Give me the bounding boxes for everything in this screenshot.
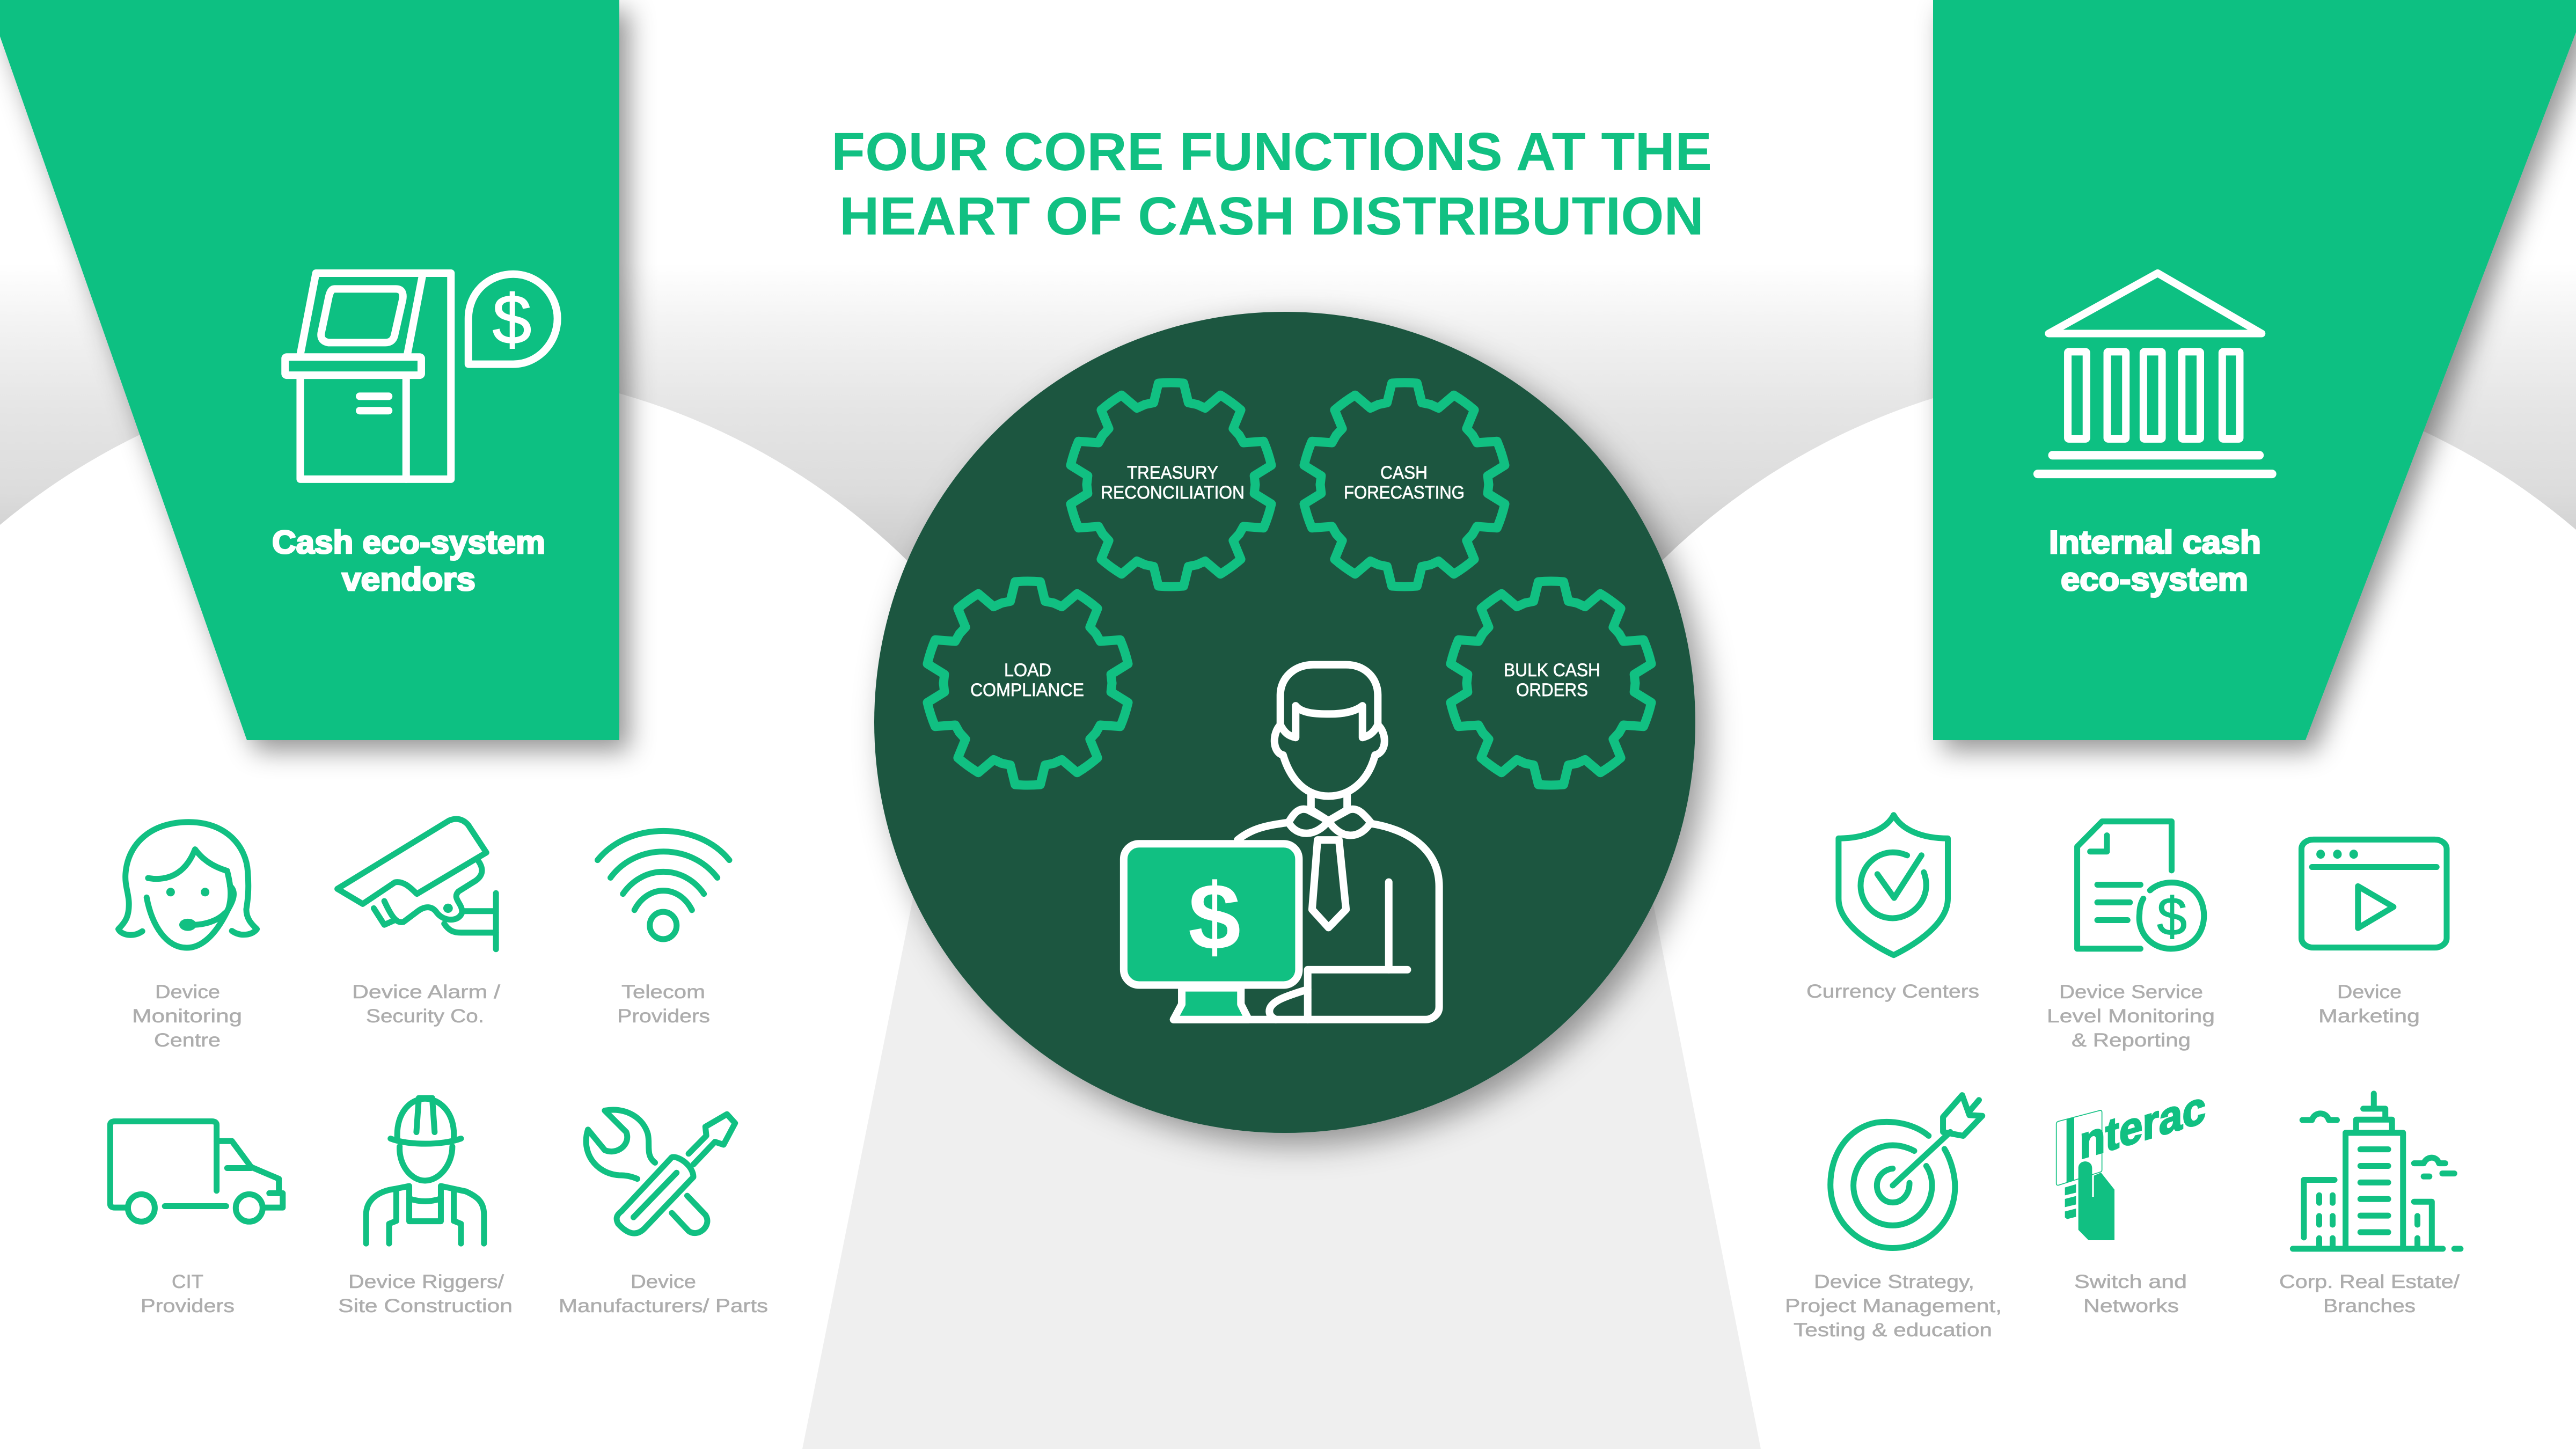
label: switch and networks: Networks: [2083, 1296, 2179, 1316]
label: device alarm: Security Co.: [366, 1006, 484, 1027]
label: device service level: Device Service: [2059, 982, 2203, 1002]
label: device riggers: Device Riggers/: [348, 1271, 504, 1292]
panel heading: [2049, 524, 2261, 597]
panel: internal cash eco-system: [1933, 0, 2576, 740]
panel heading: [272, 524, 545, 597]
label: device marketing: Device: [2337, 982, 2402, 1002]
label: cit providers: Providers: [141, 1296, 235, 1316]
gear: bulk cash orders: [1446, 581, 1656, 785]
icon: device monitoring centre: [119, 822, 257, 948]
label: device manufacturers: Manufacturers/ Parts: [559, 1296, 768, 1316]
title: HEART OF CASH DISTRIBUTION: [839, 186, 1704, 246]
label: device monitoring centre: [132, 982, 242, 1051]
left icon grid: [110, 819, 768, 1316]
label: currency centers: Currency Centers: [1806, 981, 1979, 1002]
gear: bulk cash orders: ORDERS: [1516, 680, 1588, 700]
panel: cash eco-system vendors: [0, 0, 619, 740]
gear: bulk cash orders: BULK CASH: [1504, 660, 1600, 680]
label: device alarm: [352, 982, 500, 1027]
label: device monitoring centre: Centre: [154, 1030, 221, 1051]
panel heading: Cash eco-system: [272, 524, 545, 560]
icon: interac logo: nterac: [2080, 1081, 2206, 1169]
central dark circle: [874, 312, 1695, 1133]
icon: shield check: [1839, 815, 1948, 955]
gear: treasury reconciliation: [1066, 383, 1276, 587]
right white arc: [1459, 367, 2576, 1449]
label: corp real estate: [2279, 1271, 2460, 1316]
icon: security camera: [338, 819, 496, 949]
icon: wifi: [597, 831, 729, 939]
label: device alarm: Device Alarm /: [352, 982, 500, 1002]
panel heading: eco-system: [2061, 561, 2248, 597]
title: FOUR CORE FUNCTIONS AT THE: [831, 122, 1712, 182]
label: device monitoring centre: Monitoring: [132, 1006, 242, 1027]
label: device strategy: [1785, 1271, 2002, 1341]
gear: treasury reconciliation: TREASURY: [1127, 463, 1218, 483]
label: switch and networks: [2074, 1271, 2187, 1316]
label: corp real estate: Branches: [2323, 1296, 2416, 1316]
icon: target with arrow: [1831, 1095, 1982, 1248]
icon: construction worker: [366, 1098, 484, 1243]
icon: person at computer: $: [1188, 865, 1241, 970]
title: [831, 122, 1712, 246]
label: device service level: [2047, 982, 2215, 1051]
label: device monitoring centre: Device: [155, 982, 220, 1002]
label: cit providers: [141, 1271, 235, 1316]
label: switch and networks: Switch and: [2074, 1271, 2187, 1292]
panel heading: Internal cash: [2049, 524, 2261, 560]
label: telecom providers: Providers: [617, 1006, 710, 1027]
label: device service level: Level Monitoring: [2047, 1006, 2215, 1027]
right icon grid: [1785, 815, 2461, 1341]
label: device manufacturers: Device: [631, 1271, 696, 1292]
icon: city buildings: [2293, 1094, 2461, 1249]
label: device service level: & Reporting: [2072, 1030, 2191, 1051]
icon: interac logo: [2057, 1081, 2206, 1240]
label: cit providers: CIT: [172, 1271, 203, 1292]
label: device marketing: Marketing: [2318, 1006, 2420, 1027]
label: device strategy: Device Strategy,: [1814, 1271, 1974, 1292]
label: telecom providers: Telecom: [621, 982, 705, 1002]
icon: bank: [2038, 273, 2272, 474]
label: device strategy: Project Management,: [1785, 1296, 2002, 1316]
gear: load compliance: COMPLIANCE: [970, 680, 1084, 700]
label: device riggers: Site Construction: [338, 1296, 513, 1316]
gear: treasury reconciliation: RECONCILIATION: [1101, 482, 1245, 503]
background gradient band: [0, 258, 2576, 601]
icon: video window: [2301, 839, 2447, 948]
gear: load compliance: [923, 581, 1133, 785]
icon: document with coin: $: [2157, 887, 2187, 947]
icon: wrench and screwdriver: [586, 1110, 735, 1233]
label: corp real estate: Corp. Real Estate/: [2279, 1271, 2460, 1292]
icon: truck: [110, 1121, 283, 1221]
panel heading: vendors: [342, 561, 475, 597]
left white arc: [0, 368, 1110, 1449]
icon: ATM with dollar bubble: [285, 273, 558, 479]
icon: ATM with dollar bubble: $: [493, 280, 531, 358]
icon: person at computer: [1124, 665, 1439, 1020]
gear: cash forecasting: CASH: [1380, 463, 1428, 483]
gear: cash forecasting: [1299, 383, 1510, 587]
centre light grey trapezoid: [802, 875, 1761, 1449]
label: device marketing: [2318, 982, 2420, 1027]
label: device manufacturers: [559, 1271, 768, 1316]
icon: document with coin: [2077, 822, 2204, 949]
gear: load compliance: LOAD: [1004, 660, 1051, 680]
label: telecom providers: [617, 982, 710, 1027]
label: device riggers: [338, 1271, 513, 1316]
label: device strategy: Testing & education: [1794, 1320, 1992, 1341]
gear: cash forecasting: FORECASTING: [1344, 482, 1465, 503]
